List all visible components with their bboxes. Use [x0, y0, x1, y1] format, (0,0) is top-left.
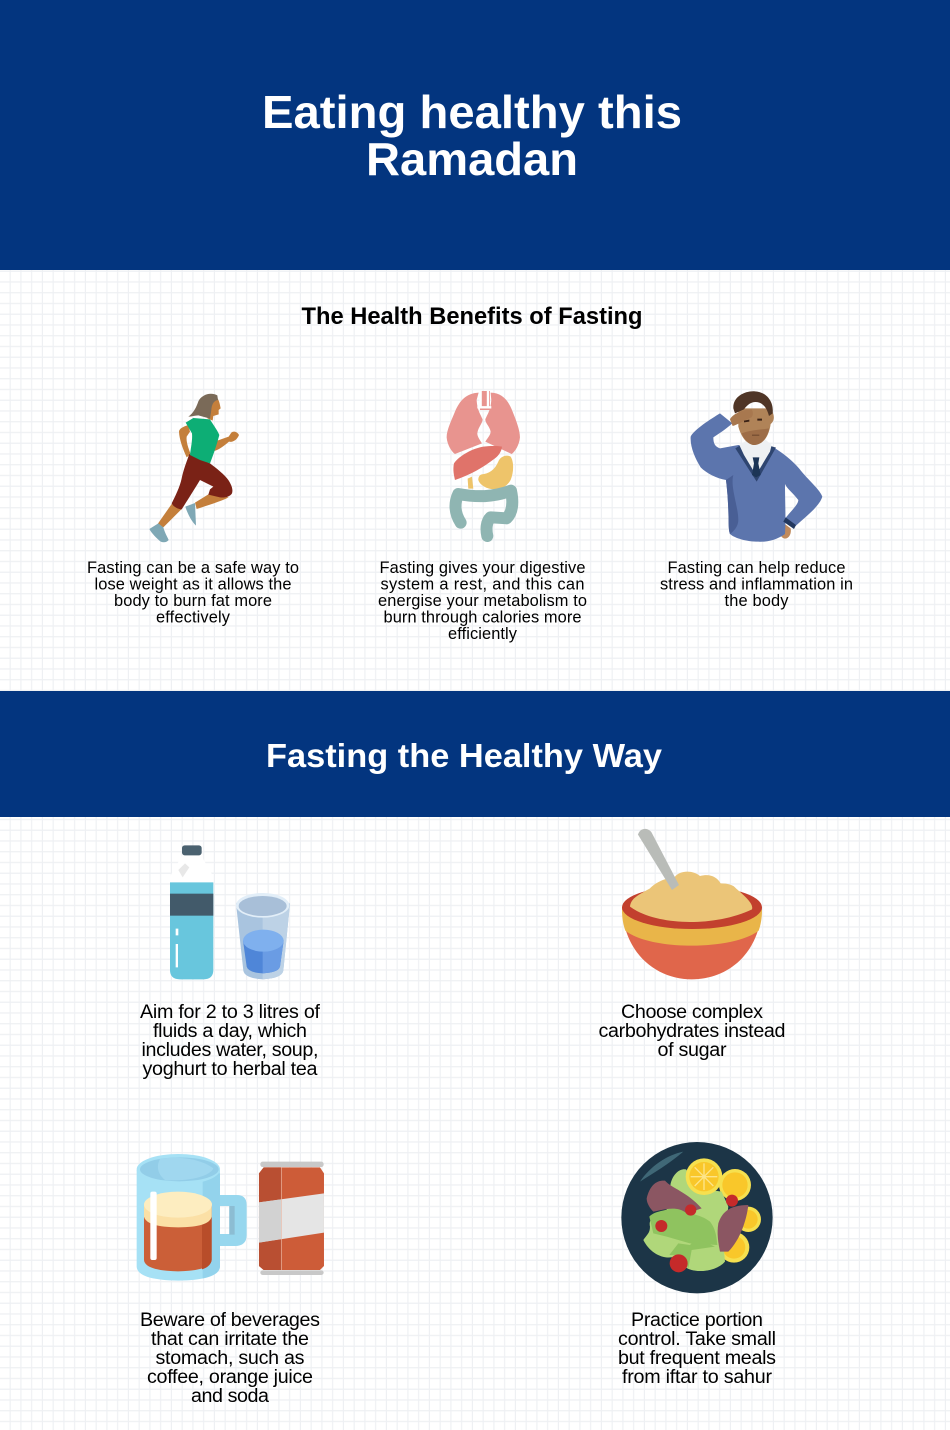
text: benefit 1 — [87, 559, 299, 626]
text: tip beverages: and soda — [191, 1385, 269, 1407]
text: tip fluids: fluids a day, which — [153, 1020, 307, 1042]
text: tip fluids: includes water, soup, — [142, 1039, 318, 1061]
icon: digestive organs — [447, 391, 520, 536]
text: benefit 2: efficiently — [448, 625, 518, 643]
text: benefit 1: effectively — [156, 608, 231, 626]
heading: fasting the healthy way: Fasting the Healthy Way — [266, 737, 663, 774]
text: benefit 2: system a rest, and this can — [380, 576, 584, 594]
header band — [0, 0, 950, 270]
text: tip portion control: from iftar to sahur — [622, 1366, 772, 1388]
text: benefit 2 — [378, 559, 587, 643]
text: tip portion control: control. Take small — [618, 1328, 776, 1350]
text: benefit 3: Fasting can help reduce — [668, 559, 846, 577]
text: tip beverages: coffee, orange juice — [147, 1366, 313, 1388]
text: benefit 3: the body — [724, 592, 789, 610]
title: Eating healthy this — [262, 86, 682, 138]
text: tip carbohydrates: carbohydrates instead — [598, 1020, 786, 1042]
text: tip carbohydrates — [598, 1001, 786, 1061]
icon: salad plate — [621, 1142, 773, 1293]
text: tip portion control — [618, 1309, 776, 1388]
text: tip carbohydrates: Choose complex — [621, 1001, 763, 1023]
icon: water bottle and glass — [170, 845, 290, 979]
title: Ramadan — [366, 133, 578, 185]
icon: porridge bowl — [622, 829, 762, 979]
text: tip fluids: yoghurt to herbal tea — [142, 1058, 318, 1080]
text: tip beverages: stomach, such as — [156, 1347, 305, 1369]
text: tip beverages: Beware of beverages — [140, 1309, 320, 1331]
icon: mug and can — [137, 1154, 324, 1281]
text: benefit 3: stress and inflammation in — [660, 576, 853, 594]
text: benefit 1: Fasting can be a safe way to — [87, 559, 299, 577]
text: benefit 2: burn through calories more — [384, 608, 582, 626]
text: benefit 3 — [660, 559, 853, 610]
text: benefit 1: body to burn fat more — [114, 592, 272, 610]
text: tip fluids: Aim for 2 to 3 litres of — [140, 1001, 321, 1023]
text: benefit 2: energise your metabolism to — [378, 592, 587, 610]
text: tip carbohydrates: of sugar — [658, 1039, 727, 1061]
icon: stressed man — [691, 391, 822, 542]
heading: health benefits: The Health Benefits of Fasting — [302, 303, 642, 330]
text: tip portion control: Practice portion — [631, 1309, 763, 1331]
icon: running woman — [149, 394, 239, 542]
text: tip beverages — [140, 1309, 320, 1407]
text: tip fluids — [140, 1001, 321, 1080]
text: benefit 1: lose weight as it allows the — [94, 576, 292, 594]
text: tip beverages: that can irritate the — [151, 1328, 309, 1350]
text: tip portion control: but frequent meals — [618, 1347, 776, 1369]
band: fasting the healthy way — [0, 691, 950, 817]
title — [262, 86, 682, 185]
text: benefit 2: Fasting gives your digestive — [380, 559, 586, 577]
